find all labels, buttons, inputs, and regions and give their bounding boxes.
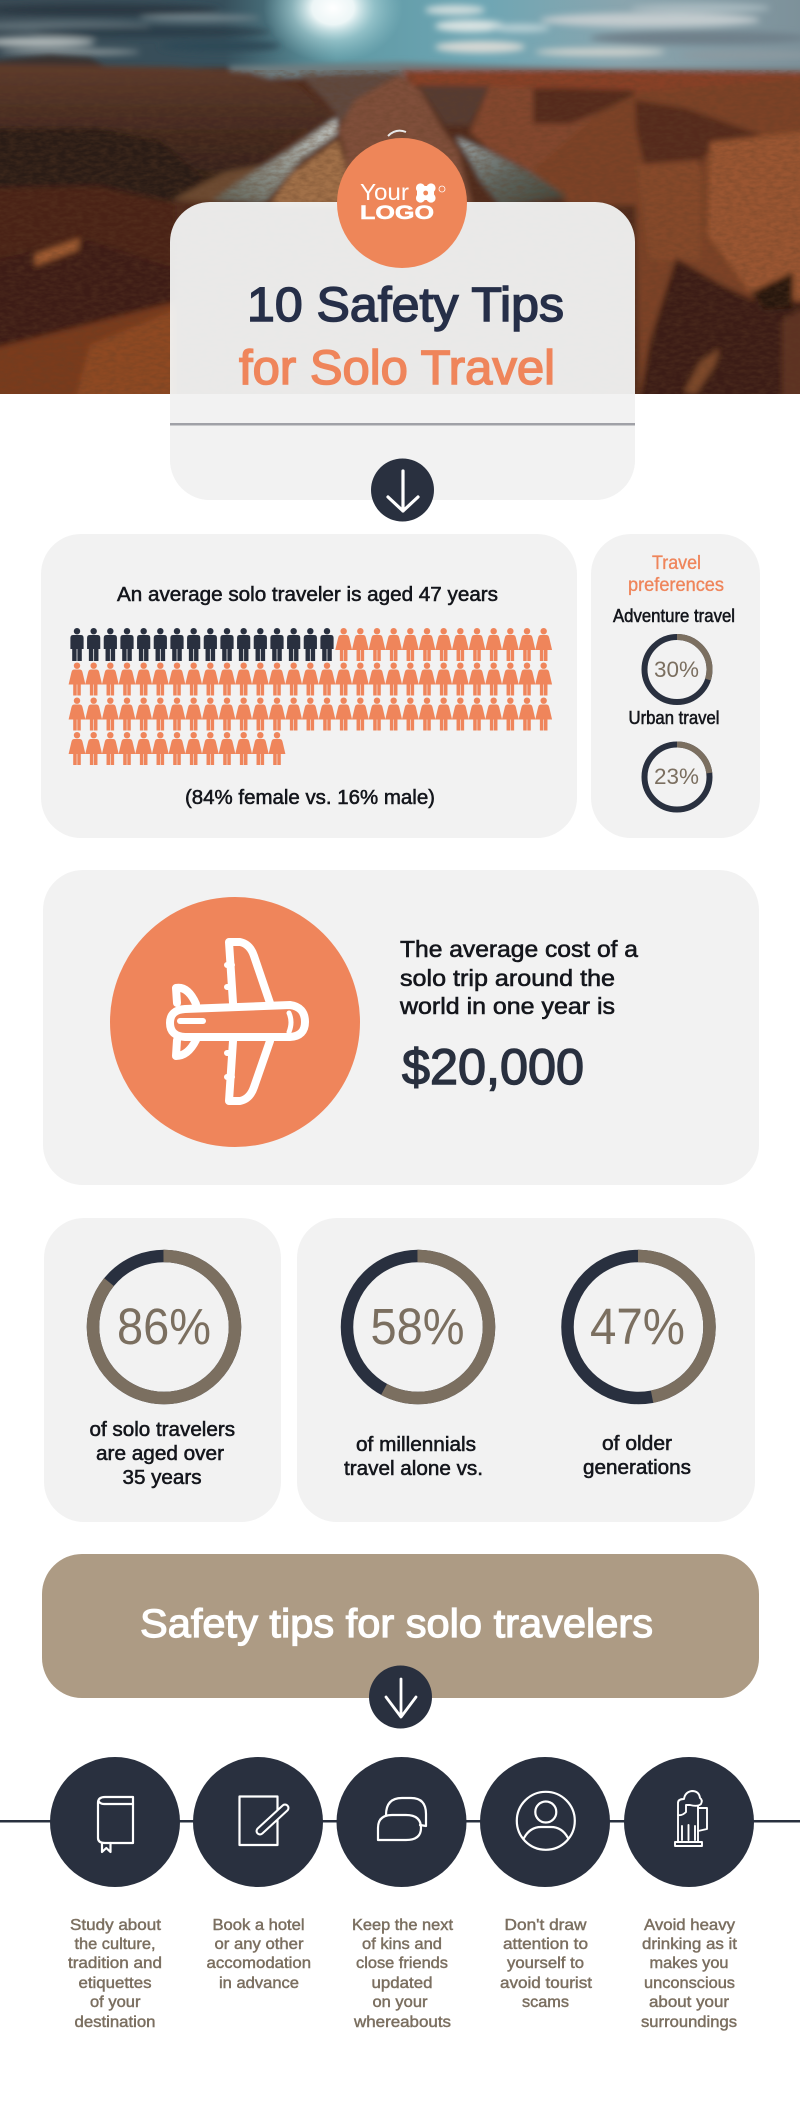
- tip text: yourself to: [507, 1955, 584, 1972]
- panel: generations: [297, 1218, 755, 1522]
- tip text: Don't draw: [504, 1917, 587, 1934]
- donut: 86%: 86%: [117, 1298, 211, 1355]
- pictogram: 100 people: [69, 628, 552, 765]
- cost description: solo trip around the: [400, 965, 615, 991]
- tip text: drinking as it: [642, 1936, 738, 1953]
- donut: 47%: [568, 1256, 710, 1398]
- tip 1: study culture: [50, 1757, 180, 2031]
- logo badge: LOGO: [360, 203, 434, 224]
- age heading: An average solo traveler is aged 47 years: [117, 584, 498, 606]
- title line 1: 10 Safety Tips: [247, 279, 564, 332]
- tip text: [352, 1917, 454, 2031]
- icon: book: [98, 1797, 133, 1852]
- tip text: scams: [522, 1994, 569, 2011]
- donut: 58%: 58%: [370, 1298, 464, 1355]
- tip text: etiquettes: [78, 1975, 152, 1992]
- title line 2: for Solo Travel: [239, 342, 555, 395]
- panel: age and gender: [41, 534, 577, 838]
- tip text: makes you: [650, 1955, 728, 1972]
- tip text: updated: [372, 1975, 432, 1992]
- arrow button: banner: [369, 1666, 432, 1728]
- caption: millennials: of millennials: [356, 1434, 476, 1456]
- preferences heading: preferences: [628, 575, 724, 596]
- tip text: surroundings: [641, 2014, 737, 2031]
- tip text: Keep the next: [352, 1917, 454, 1934]
- caption: older generations: of older: [602, 1433, 672, 1455]
- tip text: accomodation: [206, 1955, 311, 1972]
- tip text: of kins and: [362, 1936, 442, 1953]
- tip text: tradition and: [68, 1955, 162, 1972]
- panel: age over 35: [44, 1218, 281, 1522]
- caption: older generations: [583, 1433, 691, 1479]
- urban label: Urban travel: [628, 708, 720, 728]
- icon: chat bubbles: [378, 1798, 426, 1840]
- tip text: Book a hotel: [212, 1917, 304, 1934]
- donut: 86%: [93, 1256, 235, 1398]
- cost description: world in one year is: [399, 993, 615, 1019]
- caption: are aged over: [96, 1443, 224, 1465]
- tip 2: book hotel: [193, 1757, 323, 1992]
- tip 3: keep kin updated: [336, 1757, 466, 2031]
- header photo: canyon: [0, 0, 800, 420]
- panel: travel preferences: [591, 534, 760, 838]
- tip 4: don't draw attention: [480, 1757, 610, 2011]
- tip text: the culture,: [74, 1936, 156, 1953]
- banner: safety tips: Safety tips for solo travelers: [140, 1602, 653, 1646]
- tip text: in advance: [219, 1975, 299, 1992]
- donut: 30%: 30%: [654, 657, 699, 682]
- panel: trip cost: [43, 870, 759, 1185]
- cost description: The average cost of a: [400, 936, 638, 962]
- tip text: [68, 1917, 162, 2031]
- tip text: on your: [372, 1994, 428, 2011]
- caption: millennials: [344, 1434, 483, 1480]
- cost value: $20,000: [402, 1039, 584, 1095]
- tip text: attention to: [503, 1936, 588, 1953]
- preferences heading: Travel: [652, 553, 701, 574]
- tip text: Study about: [70, 1917, 162, 1934]
- caption: [90, 1419, 235, 1489]
- logo badge: Your: [360, 179, 409, 205]
- tip text: destination: [74, 2014, 156, 2031]
- arrow button: top: [371, 458, 434, 522]
- donut: 58%: [347, 1256, 489, 1398]
- donut: 23%: [644, 744, 710, 810]
- icon: notepad and pen: [240, 1796, 285, 1845]
- icon: person: [517, 1792, 575, 1850]
- tip text: [500, 1917, 593, 2011]
- caption: older generations: generations: [583, 1457, 691, 1479]
- donut: 30%: [644, 637, 710, 702]
- caption: millennials: travel alone vs.: [344, 1458, 483, 1480]
- tip text: of your: [90, 1994, 141, 2011]
- donut: 23%: 23%: [654, 764, 699, 789]
- adventure label: Adventure travel: [613, 606, 735, 626]
- icon: beer mug: [675, 1791, 707, 1846]
- tip text: Avoid heavy: [644, 1917, 735, 1934]
- tip text: close friends: [356, 1955, 448, 1972]
- logo badge: [337, 138, 467, 268]
- gender split caption: (84% female vs. 16% male): [185, 787, 435, 809]
- tip text: avoid tourist: [500, 1975, 593, 1992]
- caption: of solo travelers: [90, 1419, 235, 1441]
- tip 5: avoid heavy drinking: [624, 1757, 754, 2031]
- title panel: [170, 202, 635, 500]
- tip text: unconscious: [644, 1975, 735, 1992]
- tip text: whereabouts: [353, 2014, 451, 2031]
- donut: 47%: 47%: [590, 1298, 685, 1355]
- tip text: about your: [649, 1994, 730, 2011]
- tip text: or any other: [214, 1936, 304, 1953]
- icon: airplane: [110, 897, 360, 1147]
- banner: safety tips: [42, 1554, 759, 1698]
- tip text: [206, 1917, 311, 1992]
- caption: 35 years: [122, 1467, 202, 1489]
- cost description: [399, 936, 638, 1019]
- preferences heading: [628, 553, 724, 596]
- tip text: [641, 1917, 738, 2031]
